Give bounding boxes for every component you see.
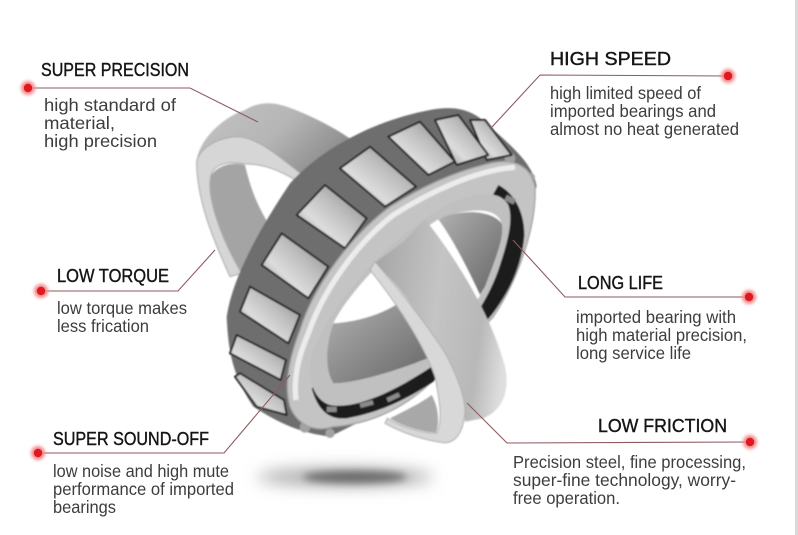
leader line and dot [21,81,258,122]
description [513,452,746,508]
description: Precision steel, fine processing, [513,452,746,472]
inner ring conical surface [310,194,510,406]
heading: LONG LIFE [578,273,663,293]
callout: super precision [21,60,258,151]
description: less frication [57,316,149,336]
leader line and dot [467,403,757,449]
heading: SUPER SOUND-OFF [53,429,209,449]
description: performance of imported [53,479,234,499]
heading: HIGH SPEED [550,49,671,69]
description: super-fine technology, worry- [513,470,736,490]
callout: high speed [492,49,739,139]
lower crescent of outer ring [390,395,438,433]
outer ring, rear part [197,103,357,277]
description: low noise and high mute [53,461,229,481]
cage body [227,108,537,437]
description: bearings [53,497,116,517]
callout: low friction [467,403,757,508]
heading: SUPER PRECISION [41,60,189,80]
leader line and dot [513,240,756,304]
description [44,95,176,151]
tapered rollers [230,115,512,415]
bearing illustration [197,103,537,443]
description: material, [44,113,115,133]
description: free operation. [513,488,620,508]
description: high precision [44,131,157,151]
description: high limited speed of [550,83,701,103]
description [57,298,187,336]
leader line and dot [34,250,215,298]
ground shadow [257,468,433,486]
description: imported bearings and [550,101,716,121]
description: low torque makes [57,298,187,318]
callout: long life [513,240,756,363]
inner surface seen right of outer ring [438,212,502,295]
cavity detail [327,195,516,412]
outer ring, front band [375,219,507,422]
roller cavity, dark [312,185,524,419]
description: long service life [576,343,691,363]
leader line and dot [31,375,290,460]
description: almost no heat generated [550,119,739,139]
leader line and dot [492,69,735,127]
description: high material precision, [576,325,747,345]
flange highlight [295,167,515,400]
callout: super sound-off [31,375,290,517]
description [550,83,739,139]
outer ring, front rim [370,262,465,443]
description: imported bearing with [576,307,736,327]
heading: LOW FRICTION [598,416,727,436]
description [576,307,747,363]
inner surface seen lower-left [327,303,427,383]
roller pins [300,153,535,438]
heading: LOW TORQUE [57,266,169,286]
inner ring flange [287,162,535,429]
bore opening [327,210,502,383]
description: high standard of [44,95,176,115]
description [53,461,234,517]
callout: low torque [34,250,215,336]
